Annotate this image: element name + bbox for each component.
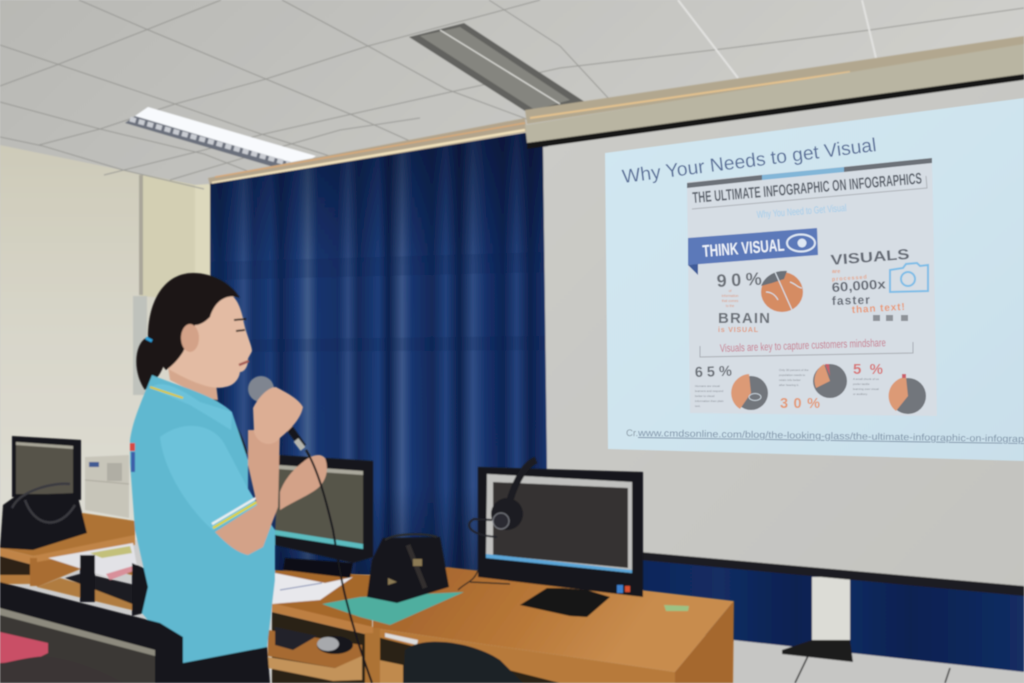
keyboard bbox=[275, 627, 317, 650]
left desk bbox=[0, 513, 140, 612]
30 percent stat and pie: retain info better bbox=[779, 378, 801, 382]
90 percent stat: that comes bbox=[722, 299, 739, 303]
small handbag bbox=[367, 534, 449, 603]
left monitor bbox=[12, 436, 81, 500]
screen bottom bar bbox=[640, 552, 1024, 596]
mindshare banner bbox=[700, 337, 913, 357]
curtain rail glow bbox=[208, 36, 1024, 186]
ceiling light left bbox=[125, 107, 316, 170]
65 percent stat and pie: better to visual bbox=[695, 394, 715, 398]
30 percent stat and pie: after hearing it. bbox=[779, 383, 799, 387]
mouse bbox=[317, 636, 353, 654]
65 percent stat and pie: information than plain bbox=[695, 399, 724, 403]
65 percent stat and pie: Humans are visual bbox=[695, 384, 720, 388]
top colour bar bbox=[687, 158, 932, 188]
projected slide bbox=[605, 98, 1024, 461]
5 percent stat and pie bbox=[853, 361, 926, 414]
infographic panel bbox=[687, 158, 937, 416]
30 percent stat and pie: Only 30 percent of the bbox=[779, 368, 809, 372]
right monitor bbox=[478, 467, 643, 597]
curtain bbox=[210, 133, 548, 575]
ceiling bbox=[0, 0, 1024, 189]
slide credit link: www.cmdsonline.com/blog/the-looking-glass/the-ultimate-infographic-on-infograp bbox=[637, 428, 1024, 445]
visuals stat bbox=[830, 247, 910, 321]
projector screen housing bbox=[525, 44, 1024, 143]
screen housing shadow bbox=[527, 74, 1024, 149]
arm bbox=[215, 430, 280, 555]
90 percent stat: 90% bbox=[716, 269, 762, 291]
black holder bbox=[80, 555, 95, 602]
icon: camera bbox=[890, 263, 928, 292]
90 percent stat: of bbox=[729, 289, 731, 293]
foreground scene bbox=[0, 273, 734, 683]
microphone cable bbox=[306, 450, 372, 683]
presenter bbox=[130, 273, 372, 683]
lower curtain bbox=[640, 555, 1024, 676]
eye and brow bbox=[234, 319, 246, 331]
lips bbox=[239, 361, 249, 365]
dark coat bbox=[0, 657, 123, 683]
monitor stand bbox=[520, 588, 610, 617]
shirt bbox=[130, 375, 275, 663]
think visual ribbon: THINK VISUAL bbox=[702, 236, 785, 261]
think visual ribbon bbox=[688, 228, 818, 275]
30 percent stat and pie bbox=[779, 364, 847, 412]
sleeve cuff stripes bbox=[212, 498, 257, 528]
65 percent stat and pie: 65% bbox=[695, 364, 732, 381]
headset bbox=[469, 460, 536, 537]
hair lock over shoulder bbox=[208, 393, 248, 455]
hair bbox=[148, 273, 240, 370]
wall bbox=[0, 140, 215, 540]
ponytail bbox=[136, 337, 165, 390]
microphone bbox=[248, 376, 303, 449]
90 percent stat: information bbox=[722, 294, 738, 298]
ear bbox=[181, 324, 199, 352]
ceiling light right bbox=[409, 23, 585, 118]
infographic subheading: Why You Need to Get Visual bbox=[756, 203, 847, 221]
visuals stat: 60,000x bbox=[831, 276, 887, 295]
icon: brain bbox=[761, 271, 803, 312]
visuals stat: than text! bbox=[852, 302, 905, 316]
90 percent stat: BRAIN bbox=[718, 310, 770, 327]
monitor cable bbox=[458, 570, 510, 590]
pink item on screen bbox=[0, 632, 48, 663]
90 percent stat: is VISUAL bbox=[718, 327, 759, 334]
icon: eye bbox=[787, 234, 815, 252]
slide credit link: Cr. bbox=[626, 428, 638, 439]
30 percent stat and pie: population needs to bbox=[779, 373, 806, 377]
visuals stat: processed bbox=[832, 275, 867, 283]
65 percent stat and pie: learners and respond bbox=[695, 389, 724, 393]
shirt logo bbox=[130, 443, 135, 472]
green folder bbox=[322, 592, 464, 625]
face bbox=[165, 292, 252, 388]
white post bbox=[782, 577, 853, 662]
floor bbox=[733, 640, 1024, 683]
left hand bbox=[280, 455, 327, 510]
right hand bbox=[253, 387, 303, 444]
30 percent stat and pie: 30% bbox=[780, 396, 820, 412]
office chair back bbox=[403, 642, 523, 683]
5 percent stat and pie: learning over visual bbox=[853, 387, 879, 391]
90 percent stat bbox=[716, 269, 770, 334]
projector screen bbox=[543, 80, 1024, 587]
trousers bbox=[183, 645, 270, 683]
90 percent stat: to the bbox=[726, 304, 734, 308]
5 percent stat and pie: A small chunk of us bbox=[853, 377, 879, 381]
neck bbox=[167, 360, 218, 400]
collar bbox=[150, 384, 232, 430]
papers on left desk bbox=[48, 543, 137, 580]
65 percent stat and pie: text. bbox=[695, 404, 701, 408]
center desk bbox=[268, 570, 373, 683]
visuals stat: VISUALS bbox=[830, 247, 910, 269]
printer bbox=[85, 455, 129, 518]
visuals stat: faster bbox=[832, 293, 870, 308]
5 percent stat and pie: or auditory. bbox=[853, 392, 868, 396]
front monitor bbox=[0, 582, 183, 683]
left handbag bbox=[0, 484, 87, 550]
dark object behind presenter bbox=[132, 563, 148, 616]
65 percent stat and pie bbox=[695, 364, 768, 410]
hair tie bbox=[146, 338, 152, 341]
slide background bbox=[605, 98, 1024, 461]
heading underline bbox=[692, 176, 927, 209]
papers on center desk bbox=[272, 573, 353, 604]
sleeve bbox=[160, 426, 258, 530]
center monitor bbox=[275, 455, 373, 578]
5 percent stat and pie: 5% bbox=[853, 361, 883, 378]
right desk bbox=[373, 567, 734, 683]
mindshare banner: Visuals are key to capture customers mindshare bbox=[720, 337, 886, 355]
slide title: Why Your Needs to get Visual bbox=[621, 135, 878, 188]
5 percent stat and pie: prefer tactile bbox=[853, 382, 870, 386]
visuals stat: are bbox=[832, 269, 840, 275]
